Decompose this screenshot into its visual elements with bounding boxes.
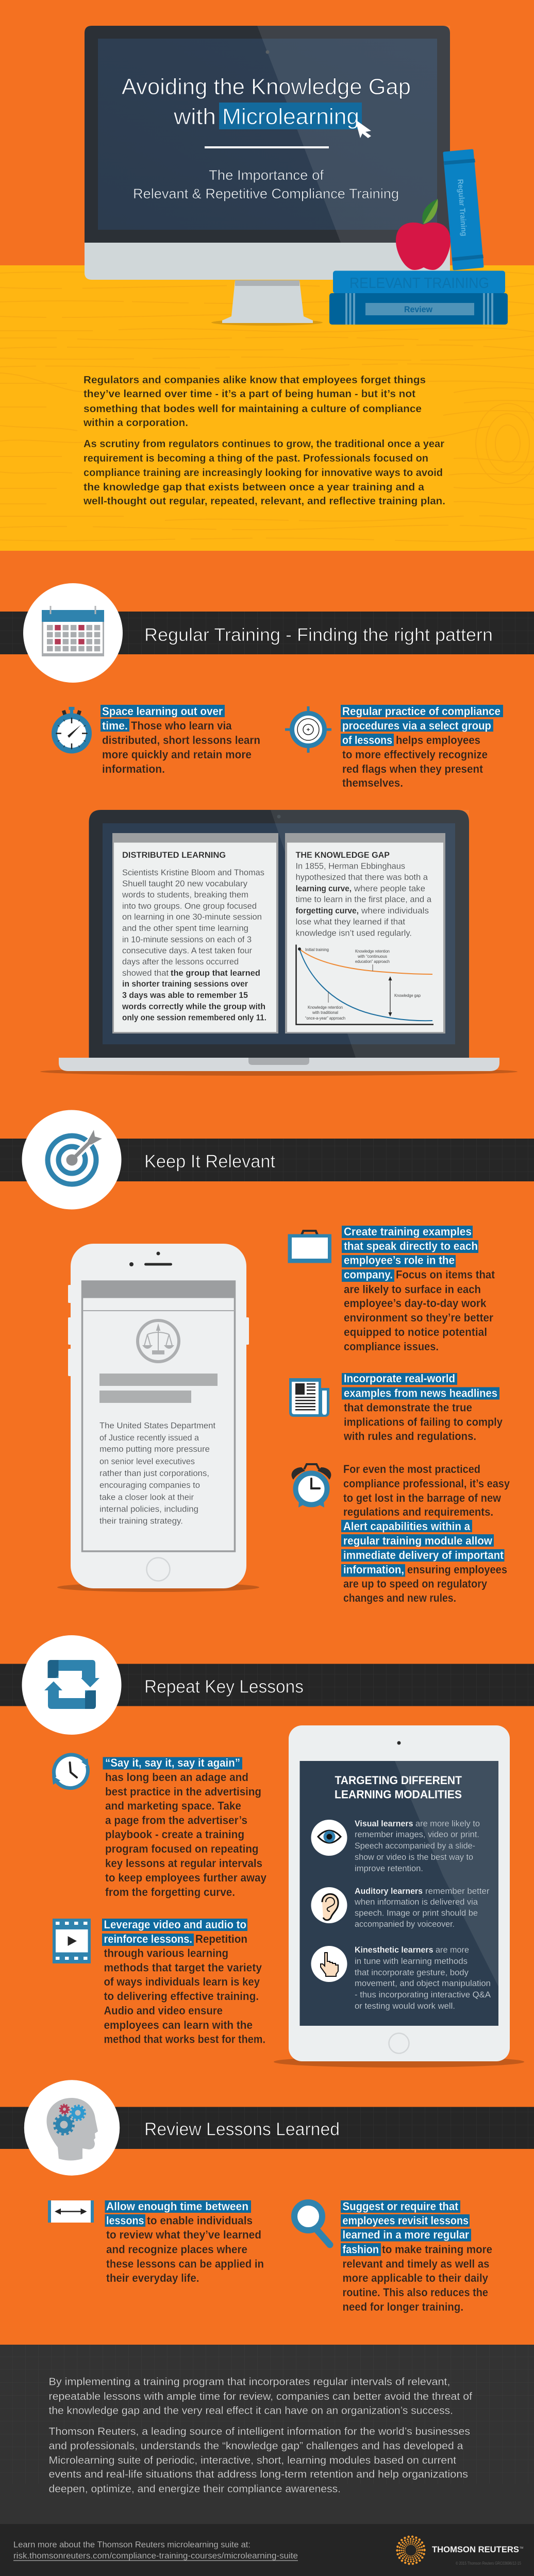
panel: distributed learning: into two groups. One group focused xyxy=(122,901,257,911)
text: regular practice: Regular practice of compliance xyxy=(342,705,500,718)
text: create training examples: are likely to surface in each xyxy=(344,1283,481,1296)
phone article text: encouraging companies to xyxy=(99,1480,200,1490)
conclusion panel: repeatable lessons with ample time for review, companies can better avoid the threat of xyxy=(48,2391,472,2402)
panel: distributed learning: in shorter training sessions over xyxy=(122,979,248,989)
text: kinesthetic learners: in tune with learning methods xyxy=(355,1957,468,1966)
panel: knowledge gap: where people take xyxy=(354,884,425,893)
logo: thomson reuters: THOMSON REUTERS xyxy=(432,2545,519,2554)
panel: knowledge gap: In 1855, Herman Ebbinghaus xyxy=(296,861,405,871)
text: say it again: a page from the advertiser’s xyxy=(105,1814,247,1827)
text: suggest or require: relevant and timely as well as xyxy=(342,2258,490,2270)
text: say it again: “Say it, say it, say it again” xyxy=(105,1756,240,1769)
panel: distributed learning: days after the lessons occurred xyxy=(122,957,239,967)
intro text: requirement is becoming a thing of the past. Professionals focused on xyxy=(84,453,428,464)
icon: briefcase xyxy=(288,1230,331,1263)
text: regular practice: procedures via a select group xyxy=(342,719,491,732)
logo: thomson reuters: © 2015 Thomson Reuters GRC03696/12-15 xyxy=(456,2561,521,2566)
conclusion panel xyxy=(0,2345,534,2524)
panel: distributed learning: the group that learned xyxy=(171,968,260,978)
phone article text: The United States Department xyxy=(99,1421,215,1430)
text: visual learners: show or video is the best way to xyxy=(355,1853,473,1862)
text: regular practice: red flags when they present xyxy=(342,762,483,775)
section header: keep it relevant xyxy=(0,1139,534,1181)
icon: crosshair xyxy=(285,706,331,753)
text: allow enough time xyxy=(105,2200,264,2284)
panel: distributed learning: consecutive days. A test taken four xyxy=(122,946,252,955)
chart: forgetting curve: Knowledge retention xyxy=(308,1005,343,1010)
phone article text: their training strategy. xyxy=(99,1516,183,1526)
conclusion panel: events and real-life situations that address long-term retention and help organizations xyxy=(48,2469,468,2480)
text: allow enough time: and recognize places where xyxy=(106,2243,247,2256)
footer link text: Learn more about the Thomson Reuters microlearning suite at: xyxy=(13,2540,251,2549)
panel: knowledge gap: hypothesized that there was both a xyxy=(296,872,428,882)
panel: distributed learning: DISTRIBUTED LEARNING xyxy=(122,850,226,860)
conclusion panel: Thomson Reuters, a leading source of intelligent information for the world’s businesses xyxy=(48,2426,470,2437)
intro text: well-thought out regular, repeated, relevant, and reflective training plan. xyxy=(83,496,445,507)
text: alert capabilities: For even the most practiced xyxy=(343,1463,480,1476)
text: kinesthetic learners: that incorporate gesture, body xyxy=(355,1968,469,1977)
monitor xyxy=(85,26,450,326)
text: leverage video: employees can learn with the xyxy=(104,2019,253,2031)
tablet body xyxy=(274,1725,524,2067)
text: create training examples: environment so they’re better xyxy=(344,1311,493,1324)
conclusion panel: the knowledge gap and the very real effect it can have on an organization’s success. xyxy=(48,2405,453,2416)
text: create training examples: employee’s day-to-day work xyxy=(344,1297,487,1310)
laptop body xyxy=(40,810,518,1076)
text: alert capabilities: immediate delivery of important xyxy=(343,1549,504,1562)
text: alert capabilities: changes and new rules. xyxy=(343,1591,456,1604)
section header: regular training xyxy=(0,612,534,654)
text: real-world examples: implications of failing to comply xyxy=(344,1416,503,1428)
intro text: compliance training are increasingly looking for innovative ways to avoid xyxy=(84,467,443,479)
text: kinesthetic learners: - thus incorporating interactive Q&A xyxy=(355,1990,491,1999)
panel: distributed learning: words correctly while the group with xyxy=(122,1002,265,1011)
intro text: they’ve learned over time - it’s a part of being human - but it’s not xyxy=(84,388,415,400)
panel: distributed learning: in 10-minute sessions on each of 3 xyxy=(122,935,252,944)
text: regular practice xyxy=(341,705,503,789)
title: Microlearning xyxy=(222,104,359,129)
tablet heading xyxy=(335,1774,462,1801)
text: alert capabilities: are up to speed on regulatory xyxy=(343,1578,488,1590)
icon: video film xyxy=(53,1919,91,1963)
chart: forgetting curve: Knowledge gap xyxy=(394,993,421,998)
text: say it again: key lessons at regular intervals xyxy=(105,1857,262,1870)
section header: review lessons learned: Review Lessons Learned xyxy=(144,2120,340,2139)
text: create training examples: that speak directly to each xyxy=(344,1240,478,1252)
intro text xyxy=(83,375,445,507)
text: allow enough time: to enable individuals xyxy=(147,2214,253,2227)
book: regular training: Regular Training xyxy=(456,179,469,236)
panel: distributed learning: Scientists Kristine Bloom and Thomas xyxy=(122,868,264,877)
text: say it again: best practice in the advertising xyxy=(105,1785,261,1798)
text: leverage video: to delivering effective training. xyxy=(104,1990,259,2003)
panel: knowledge gap: forgetting curve, xyxy=(296,906,359,916)
icon: double arrow xyxy=(48,2200,94,2223)
section header: regular training: Regular Training - Finding the right pattern xyxy=(144,625,493,645)
icon: newspaper xyxy=(289,1378,329,1417)
subtitle xyxy=(133,146,399,201)
panel: distributed learning: 3 days was able to remember 15 xyxy=(122,990,248,1000)
icon: magnifier xyxy=(294,2202,330,2245)
conclusion panel: and professionals, understands the “knowledge gap” challenges and has developed a xyxy=(48,2441,463,2452)
wooden desk background xyxy=(0,265,534,551)
icon: alarm clock xyxy=(292,1464,331,1507)
text: alert capabilities: information, xyxy=(343,1563,404,1576)
icon: stopwatch xyxy=(55,707,89,751)
text: suggest or require: to make training more xyxy=(382,2243,492,2256)
icon: scales of justice xyxy=(138,1320,179,1362)
section header: repeat key lessons: Repeat Key Lessons xyxy=(144,1676,304,1697)
phone article text: rather than just corporations, xyxy=(99,1468,209,1478)
text: real-world examples: that demonstrate the true xyxy=(344,1401,472,1414)
phone article text xyxy=(99,1421,215,1526)
text: say it again: from the forgetting curve. xyxy=(105,1886,235,1899)
text: allow enough time: lessons xyxy=(106,2214,144,2227)
logo: thomson reuters: TM xyxy=(520,2547,523,2550)
title: Avoiding the Knowledge Gap xyxy=(122,74,411,99)
text: auditory learners: accompanied by voiceover. xyxy=(355,1920,455,1929)
text: say it again: has long been an adage and xyxy=(105,1771,248,1784)
book: review: Review xyxy=(404,304,433,314)
text: leverage video xyxy=(102,1918,265,2045)
panel: knowledge gap: where individuals xyxy=(361,906,429,916)
text: suggest or require: fashion xyxy=(342,2243,379,2256)
text: auditory learners xyxy=(354,1887,490,1929)
text: space learning: more quickly and retain more xyxy=(102,748,252,761)
book: relevant training: RELEVANT TRAINING xyxy=(349,275,489,292)
intro text: Regulators and companies alike know that employees forget things xyxy=(84,375,426,386)
text: regular practice: themselves. xyxy=(342,776,403,789)
text: create training examples: compliance issues. xyxy=(344,1340,439,1353)
panel: distributed learning: words to students, breaking them xyxy=(122,890,248,900)
icon: clock with arrows xyxy=(52,1754,89,1788)
chart: forgetting curve: “once-a-year” approach xyxy=(305,1016,345,1021)
text: leverage video: method that works best for them. xyxy=(104,2033,265,2045)
book: relevant training xyxy=(333,271,505,294)
icon: calendar xyxy=(23,583,123,683)
panel: distributed learning xyxy=(112,833,278,1033)
icon: ear xyxy=(311,1887,347,1923)
section header: review lessons learned xyxy=(0,2107,534,2149)
text: space learning: distributed, short lessons learn xyxy=(102,734,260,747)
text: kinesthetic learners: movement, and object manipulation xyxy=(355,1979,491,1988)
text: auditory learners: when information is delivered via xyxy=(354,1897,478,1907)
chart: forgetting curve: education” approach xyxy=(355,959,390,964)
text: visual learners xyxy=(355,1819,480,1873)
icon: dartboard xyxy=(22,1110,122,1210)
panel: knowledge gap xyxy=(285,833,445,1033)
section header: repeat key lessons xyxy=(0,1664,534,1706)
text: allow enough time: Allow enough time between xyxy=(106,2200,248,2213)
text: auditory learners: remember better xyxy=(425,1887,490,1896)
tablet xyxy=(274,1725,524,2067)
icon: cursor xyxy=(355,120,371,138)
text: kinesthetic learners xyxy=(355,1945,491,2011)
phone article text: on senior level executives xyxy=(99,1456,195,1466)
text: create training examples: Create training examples xyxy=(344,1225,472,1238)
chart: forgetting curve: Knowledge retention xyxy=(355,949,390,954)
text: real-world examples: examples from news headlines xyxy=(344,1387,497,1399)
text: kinesthetic learners: or testing would work well. xyxy=(355,2002,455,2011)
text: leverage video: reinforce lessons. xyxy=(104,1933,192,1945)
text: say it again: program focused on repeating xyxy=(105,1842,259,1855)
text: leverage video: Audio and video ensure xyxy=(104,2004,223,2017)
text: say it again xyxy=(103,1756,267,1899)
phone article text: memo putting more pressure xyxy=(99,1444,210,1454)
text: space learning: time. xyxy=(102,719,128,732)
text: suggest or require: more applicable to their daily xyxy=(342,2272,489,2284)
text: alert capabilities: to get lost in the barrage of new xyxy=(343,1492,502,1504)
text: create training examples xyxy=(342,1225,495,1353)
text: create training examples: company. xyxy=(344,1268,393,1281)
panel: distributed learning: only one session remembered only 11. xyxy=(122,1013,266,1022)
title: with xyxy=(173,104,216,129)
title xyxy=(122,74,411,129)
book: regular training xyxy=(444,150,483,269)
monitor frame xyxy=(85,26,450,280)
subtitle: Relevant & Repetitive Compliance Training xyxy=(133,186,399,201)
book: review xyxy=(329,293,508,325)
phone xyxy=(57,1244,259,1592)
text: allow enough time: their everyday life. xyxy=(106,2272,199,2284)
chart: forgetting curve: Initial training xyxy=(305,947,329,952)
text: visual learners: improve retention. xyxy=(355,1864,423,1873)
text: visual learners: are more likely to xyxy=(415,1819,480,1828)
text: regular practice: of lessons xyxy=(342,734,392,747)
text: regular practice: to more effectively recognize xyxy=(342,748,488,761)
conclusion panel: deepen, optimize, and energize their compliance awareness. xyxy=(48,2483,341,2495)
text: leverage video: Leverage video and audio to xyxy=(104,1918,246,1931)
text: allow enough time: these lessons can be applied in xyxy=(106,2258,264,2270)
panel: knowledge gap: knowledge isn’t used regularly. xyxy=(296,928,412,938)
phone article text: take a closer look at their xyxy=(99,1492,194,1502)
icon: pointing hand xyxy=(311,1946,347,1982)
chart: forgetting curve: with traditional xyxy=(312,1010,338,1015)
chart: forgetting curve: with “continuous xyxy=(357,954,387,959)
monitor stand xyxy=(211,280,323,326)
text: alert capabilities: regulations and requirements. xyxy=(343,1505,493,1518)
text: alert capabilities: regular training module allow xyxy=(343,1534,493,1547)
text: leverage video: of ways individuals learn is key xyxy=(104,1975,260,1988)
phone article text: internal policies, including xyxy=(99,1504,198,1514)
intro text: within a corporation. xyxy=(83,417,188,429)
panel: distributed learning: Shuell taught 20 new vocabulary xyxy=(122,879,247,888)
text: alert capabilities: compliance professional, it’s easy xyxy=(343,1477,510,1490)
text: visual learners: Visual learners xyxy=(355,1819,413,1828)
text: create training examples: equipped to notice potential xyxy=(344,1326,487,1338)
text: space learning: Those who learn via xyxy=(131,719,232,732)
text: say it again: to keep employees further away xyxy=(105,1871,267,1884)
intro text: something that bodes well for maintaining a culture of compliance xyxy=(84,403,422,415)
text: alert capabilities: ensuring employees xyxy=(407,1563,507,1576)
text: suggest or require: learned in a more regular xyxy=(342,2228,469,2241)
placeholder headline bars xyxy=(99,1374,218,1403)
text: suggest or require: need for longer training. xyxy=(342,2300,463,2313)
panel: distributed learning: showed that xyxy=(122,968,169,978)
text: alert capabilities: Alert capabilities within a xyxy=(343,1520,471,1533)
conclusion panel: By implementing a training program that incorporates regular intervals of relevant, xyxy=(48,2376,450,2387)
icon: eye xyxy=(311,1820,347,1856)
panel: knowledge gap: THE KNOWLEDGE GAP xyxy=(296,850,390,860)
intro text: the knowledge gap that exists between once a year training and a xyxy=(84,482,425,493)
tablet heading: TARGETING DIFFERENT xyxy=(335,1774,462,1787)
subtitle: The Importance of xyxy=(209,167,324,183)
panel: knowledge gap: time to learn in the first place, and a xyxy=(296,894,432,904)
text: regular practice: helps employees xyxy=(396,734,480,747)
text: alert capabilities xyxy=(341,1463,510,1604)
text: leverage video: Repetition xyxy=(195,1933,247,1945)
phone body xyxy=(57,1244,259,1592)
text: suggest or require: routine. This also reduces the xyxy=(342,2286,488,2299)
text: allow enough time: to review what they’ve learned xyxy=(106,2228,261,2241)
section header: keep it relevant: Keep It Relevant xyxy=(144,1151,275,1172)
text: create training examples: Focus on items that xyxy=(396,1268,495,1281)
panel: distributed learning: on learning in one 30-minute session xyxy=(122,912,262,922)
text: space learning xyxy=(101,705,260,775)
text: say it again: playbook - create a training xyxy=(105,1828,244,1841)
text: leverage video: methods that target the variety xyxy=(104,1961,262,1974)
text: visual learners: remember images, video or print. xyxy=(355,1830,479,1839)
text: leverage video: through various learning xyxy=(104,1946,228,1960)
panel: knowledge gap: learning curve, xyxy=(296,884,352,893)
text: kinesthetic learners: are more xyxy=(436,1945,469,1955)
icon: repeat arrows xyxy=(22,1635,122,1735)
tablet heading: LEARNING MODALITIES xyxy=(335,1788,462,1801)
conclusion panel: Microlearning suite of periodic, interactive, short, learning modules based on current xyxy=(48,2455,456,2466)
panel: knowledge gap: lose what they learned if that xyxy=(296,917,405,926)
phone screen xyxy=(81,1281,236,1551)
text: kinesthetic learners: Kinesthetic learners xyxy=(355,1945,433,1955)
text: create training examples: employee’s role in the xyxy=(344,1254,455,1266)
chart: forgetting curve xyxy=(296,945,433,1024)
panel: distributed learning: and the other spent time learning xyxy=(122,923,248,933)
text: visual learners: Speech accompanied by a slide- xyxy=(355,1841,475,1851)
text: real-world examples xyxy=(342,1372,503,1443)
text: real-world examples: Incorporate real-world xyxy=(344,1372,455,1385)
text: suggest or require xyxy=(341,2200,492,2313)
text: suggest or require: Suggest or require that xyxy=(342,2200,459,2213)
footer link text xyxy=(13,2540,298,2561)
text: auditory learners: Auditory learners xyxy=(355,1887,423,1896)
text: real-world examples: with rules and regulations. xyxy=(343,1430,476,1443)
text: say it again: and marketing space. Take xyxy=(105,1799,241,1812)
text: suggest or require: employees revisit lessons xyxy=(342,2214,469,2227)
laptop xyxy=(40,810,518,1076)
icon: head with gears xyxy=(24,2080,120,2176)
text: auditory learners: speech. Image or print should be xyxy=(355,1908,478,1918)
icon: apple xyxy=(396,199,450,270)
books and apple xyxy=(329,150,508,325)
footer xyxy=(0,2524,534,2576)
text: space learning: Space learning out over xyxy=(102,705,223,718)
intro text: As scrutiny from regulators continues to grow, the traditional once a year xyxy=(84,438,444,450)
footer link text: risk.thomsonreuters.com/compliance-training-courses/microlearning-suite xyxy=(13,2551,298,2561)
phone article text: of Justice recently issued a xyxy=(99,1433,199,1443)
logo: thomson reuters xyxy=(397,2537,523,2566)
text: space learning: information. xyxy=(102,762,165,775)
